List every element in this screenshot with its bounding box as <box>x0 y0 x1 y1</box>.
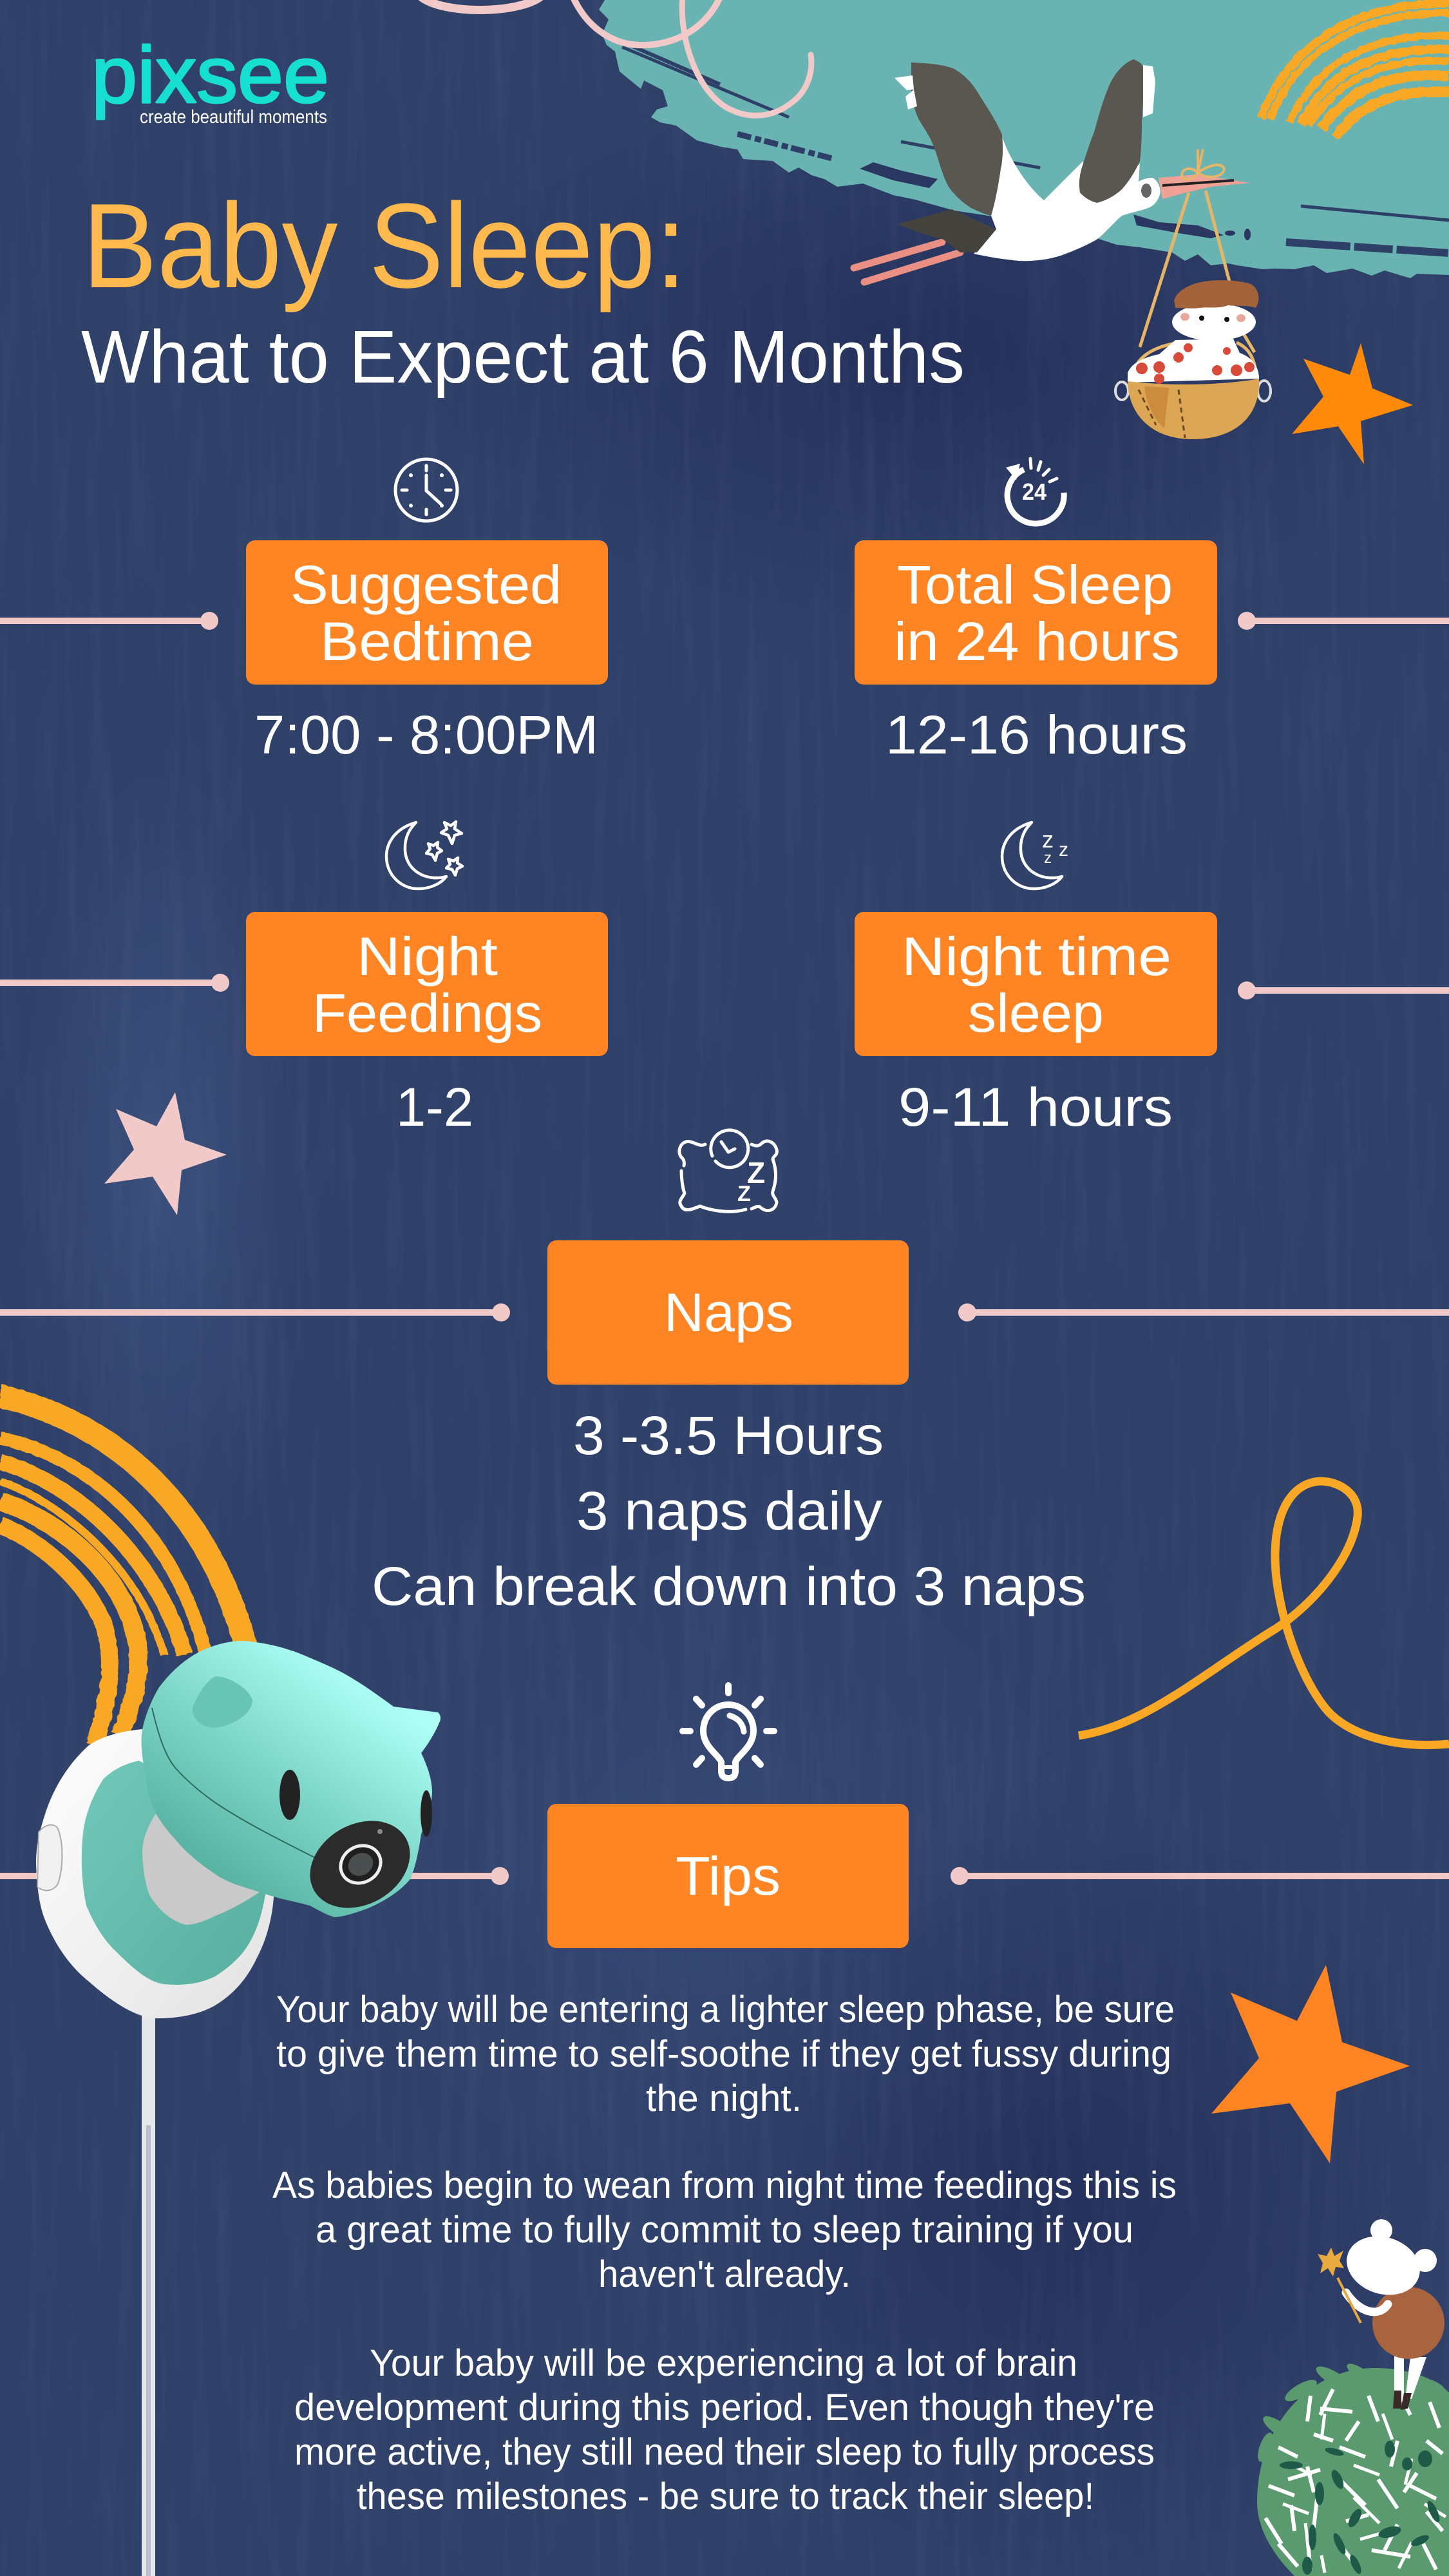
label box: Bedtime <box>320 611 534 672</box>
camera face plate <box>294 1803 426 1926</box>
label box <box>246 912 608 1056</box>
baby clothes <box>1128 339 1259 383</box>
strings <box>1140 191 1255 352</box>
label box: Suggested <box>290 554 562 615</box>
icon: moon and z's: z <box>1044 849 1052 867</box>
baby hair <box>1174 280 1258 308</box>
tips text: As babies begin to wean from night time feedings this is <box>272 2164 1177 2206</box>
connector lines <box>0 1303 1449 1321</box>
icon: light bulb <box>683 1685 774 1778</box>
icon: moon and z's <box>1002 822 1068 889</box>
camera eye <box>279 1770 300 1820</box>
tips text: these milestones - be sure to track their sleep! <box>357 2476 1094 2517</box>
stork tail <box>897 209 996 252</box>
stork legs <box>854 242 960 282</box>
stork beak and bow <box>1159 175 1249 199</box>
teal inner ring <box>82 1761 265 1985</box>
title: What to Expect at 6 Months <box>81 315 965 399</box>
tips text: to give them time to self-soothe if they get fussy during <box>276 2033 1171 2075</box>
camera seam <box>152 1708 316 1858</box>
stork right wing <box>1079 59 1143 203</box>
camera side button <box>421 1790 432 1837</box>
label box: sleep <box>968 983 1104 1043</box>
power cord <box>142 2009 155 2576</box>
icon: moon and z's: z <box>1042 826 1054 853</box>
label box: Naps <box>664 1282 793 1343</box>
orange curl <box>1079 1481 1449 1745</box>
star: orange top <box>1292 343 1413 464</box>
naps details <box>372 1405 1086 1616</box>
label box: Night <box>357 926 498 987</box>
tips text: Your baby will be entering a lighter sleep phase, be sure <box>276 1989 1175 2031</box>
camera horn <box>193 1676 252 1728</box>
naps details: Can break down into 3 naps <box>372 1556 1086 1616</box>
value: 1-2 <box>396 1077 473 1137</box>
tips section <box>0 1685 1449 2517</box>
tips text: a great time to fully commit to sleep training if you <box>316 2209 1133 2251</box>
icon: pillow with clock: Z <box>747 1156 765 1189</box>
basket handles <box>1115 381 1271 401</box>
label box: Tips <box>676 1846 781 1906</box>
label box <box>855 912 1217 1056</box>
label box: in 24 hours <box>894 611 1180 672</box>
mouse head <box>1339 2219 1437 2304</box>
bush <box>1249 2360 1449 2576</box>
icon: clock <box>395 459 457 521</box>
label box <box>547 1804 909 1948</box>
tips text: the night. <box>646 2078 802 2119</box>
ball joint <box>142 1803 260 1925</box>
tips text: Your baby will be experiencing a lot of brain <box>370 2342 1077 2384</box>
icon: pillow with clock <box>679 1130 777 1211</box>
white ring mount <box>36 1729 274 2018</box>
ring button <box>37 1825 62 1890</box>
icon: 24 hours: 24 <box>1022 478 1046 505</box>
basket <box>1128 379 1259 439</box>
illustration: pixsee camera on mount <box>36 1641 440 2576</box>
row 1 left: suggested bedtime <box>0 459 608 765</box>
baby face <box>1172 303 1256 341</box>
illustration: mouse on bush <box>1249 2219 1449 2576</box>
value: 9-11 hours <box>898 1077 1173 1137</box>
camera lens <box>334 1829 388 1890</box>
illustration: stork carrying baby in basket <box>854 59 1271 439</box>
star: orange large <box>1211 1965 1410 2163</box>
orange rainbow top right <box>1261 3 1449 137</box>
naps section <box>0 1130 1449 1616</box>
logo: pixsee <box>91 31 329 120</box>
logo: create beautiful moments <box>140 107 327 128</box>
icon: moon and z's: z <box>1059 839 1068 860</box>
icon: moon and stars <box>386 822 462 889</box>
stork wing tufts <box>895 75 917 109</box>
label box <box>855 540 1217 685</box>
pink curls <box>422 0 811 115</box>
icon: 24 hours <box>1006 459 1064 524</box>
camera head <box>142 1641 440 1917</box>
connector lines <box>0 1867 1449 1885</box>
connector line <box>1238 612 1449 630</box>
connector line <box>0 612 218 630</box>
label box <box>246 540 608 685</box>
connector line <box>0 974 229 992</box>
naps details: 3 naps daily <box>576 1481 882 1541</box>
mouse legs <box>1394 2354 1426 2399</box>
row 2 right: night time sleep <box>855 822 1449 1137</box>
title <box>81 178 965 399</box>
stork body <box>974 137 1160 261</box>
mouse body <box>1372 2287 1444 2359</box>
star: pink <box>104 1092 227 1215</box>
tips text: development during this period. Even though they're <box>294 2387 1155 2429</box>
icon: pillow with clock: Z <box>737 1182 751 1206</box>
tips text: more active, they still need their sleep to fully process <box>294 2431 1155 2473</box>
stork left wing <box>911 62 1003 216</box>
value: 12-16 hours <box>886 705 1188 765</box>
basket back rim <box>1135 343 1256 377</box>
row 2 left: night feedings <box>0 822 608 1137</box>
orange rainbow left <box>0 1396 248 1745</box>
naps details: 3 -3.5 Hours <box>573 1405 884 1466</box>
label box <box>547 1240 909 1385</box>
label box: Night time <box>902 926 1171 987</box>
tips text: haven't already. <box>598 2253 851 2295</box>
value: 7:00 - 8:00PM <box>254 705 598 765</box>
title: Baby Sleep: <box>82 178 687 313</box>
connector line <box>1238 981 1449 999</box>
teal brush stroke <box>599 0 1449 278</box>
mouse arm and wand <box>1346 2293 1388 2312</box>
label box: Total Sleep <box>897 554 1173 615</box>
tips text <box>272 1989 1177 2517</box>
row 1 right: total sleep <box>855 459 1449 765</box>
label box: Feedings <box>312 983 542 1043</box>
